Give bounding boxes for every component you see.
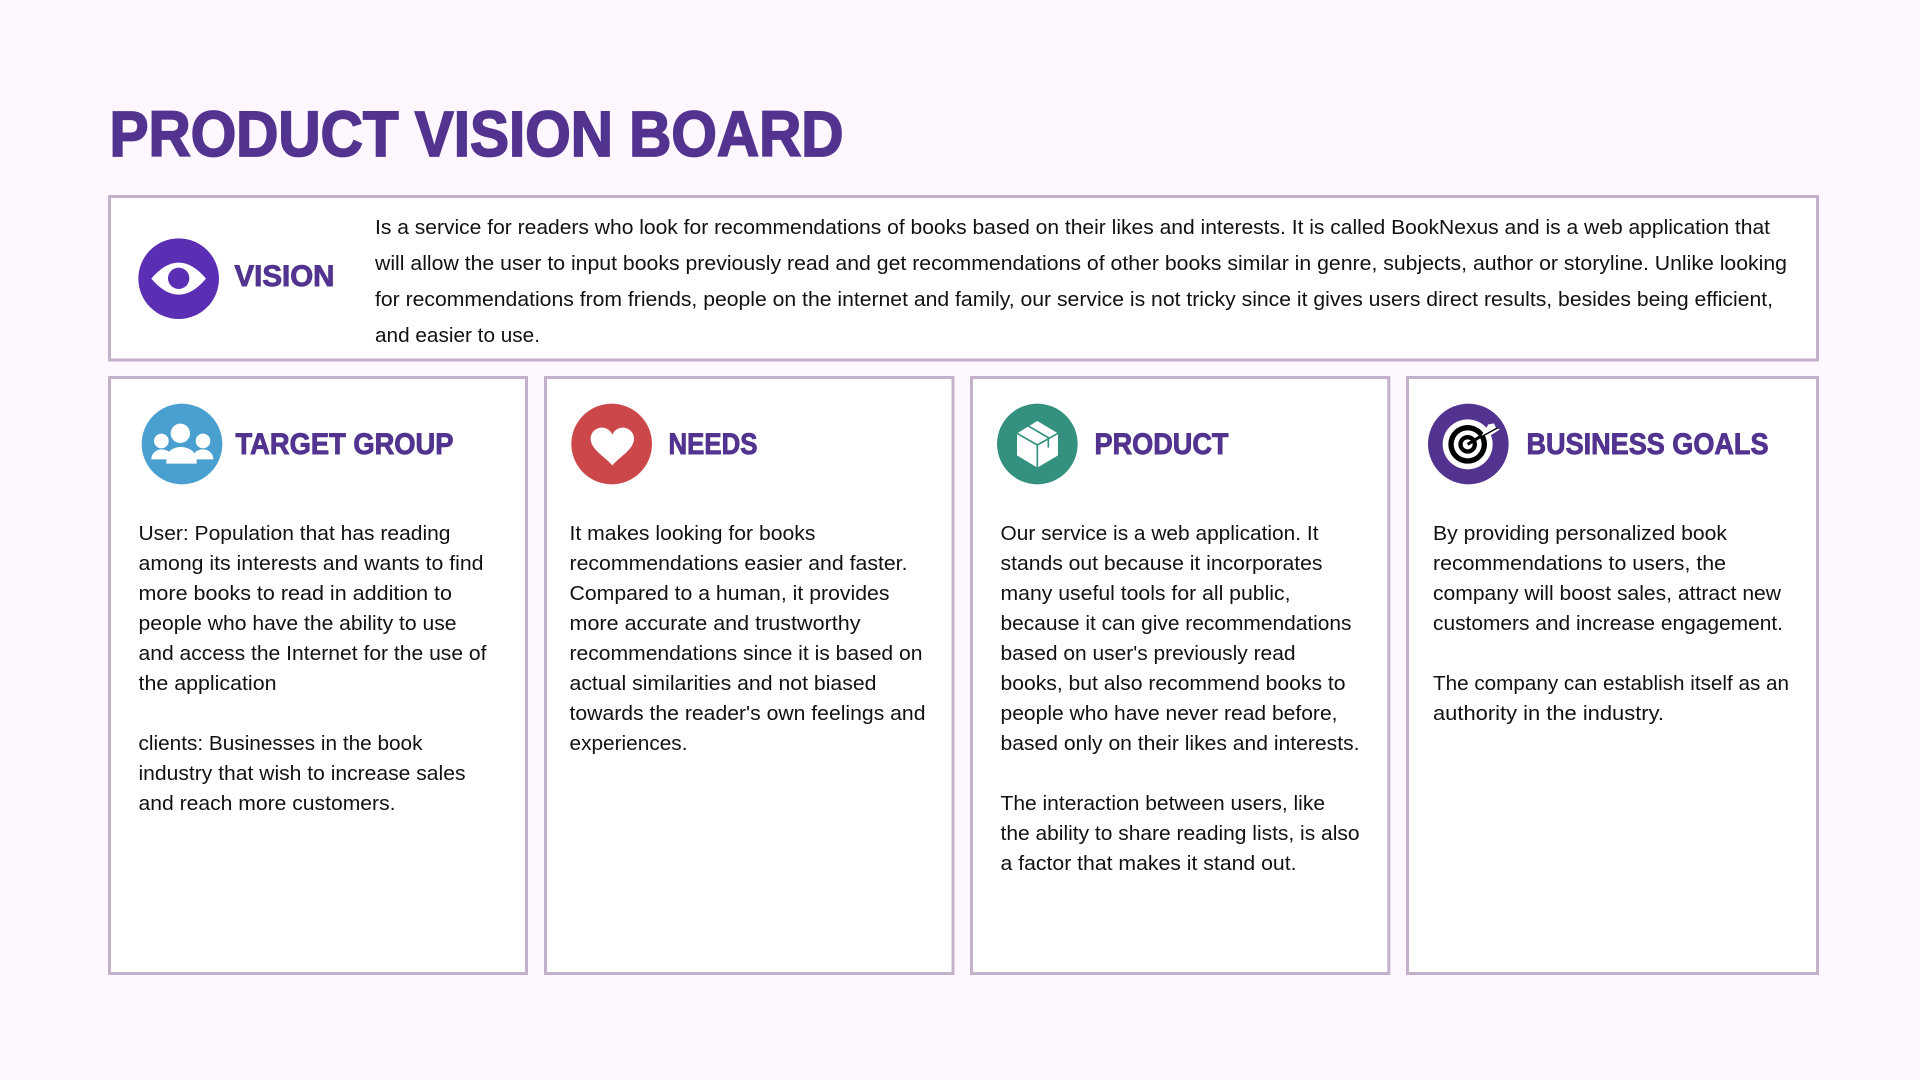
text: vision statement: Is a service for readers who look for recommendations of books based on their likes and interests. It is called BookNexus and is a web application that xyxy=(375,216,1770,239)
text: needs description: It makes looking for books xyxy=(570,522,816,545)
heading: product: PRODUCT xyxy=(1094,428,1228,461)
text: product description xyxy=(1000,522,1360,875)
text: business goals description xyxy=(1433,522,1789,725)
text: business goals description: company will boost sales, attract new xyxy=(1433,582,1781,605)
text: business goals description: customers and increase engagement. xyxy=(1433,612,1783,635)
text: vision statement xyxy=(374,216,1787,347)
text: target group description xyxy=(138,522,487,815)
text: needs description: towards the reader's own feelings and xyxy=(570,702,926,725)
text: product description: a factor that makes it stand out. xyxy=(1000,852,1296,875)
text: target group description: and reach more customers. xyxy=(138,792,396,815)
panel: target group xyxy=(110,378,526,974)
text: needs description: recommendations easier and faster. xyxy=(570,552,908,575)
icon: box xyxy=(997,404,1078,484)
panel: business goals xyxy=(1408,378,1818,974)
text: vision statement: will allow the user to input books previously read and get recommendations of other books similar in genre, subjects, author or storyline. Unlike looking xyxy=(374,252,1787,275)
text: product description: the ability to share reading lists, is also xyxy=(1000,822,1360,845)
text: product description: people who have never read before, xyxy=(1000,702,1338,725)
icon: eye xyxy=(138,238,219,319)
text: product description: books, but also recommend books to xyxy=(1000,672,1346,695)
text: needs description xyxy=(570,522,926,755)
text: product description: stands out because it incorporates xyxy=(1000,552,1322,575)
text: business goals description: By providing personalized book xyxy=(1433,522,1728,545)
icon: people xyxy=(142,404,222,484)
icon: target xyxy=(1428,404,1509,484)
text: target group description: and access the Internet for the use of xyxy=(138,642,487,665)
panel: needs xyxy=(546,378,953,974)
text: target group description: the application xyxy=(138,672,276,695)
text: target group description: among its interests and wants to find xyxy=(138,552,484,575)
heading: business goals: BUSINESS GOALS xyxy=(1526,428,1768,461)
icon: heart xyxy=(571,404,652,484)
panel: vision xyxy=(110,196,1818,360)
text: product description: The interaction between users, like xyxy=(1000,792,1325,815)
heading: vision: VISION xyxy=(234,260,334,293)
text: needs description: recommendations since it is based on xyxy=(570,642,922,665)
text: target group description: more books to read in addition to xyxy=(138,582,452,605)
text: business goals description: recommendations to users, the xyxy=(1433,552,1726,575)
text: product description: based only on their likes and interests. xyxy=(1000,732,1360,755)
text: business goals description: The company can establish itself as an xyxy=(1433,672,1789,695)
text: needs description: experiences. xyxy=(570,732,688,755)
text: needs description: Compared to a human, it provides xyxy=(570,582,890,605)
text: target group description: industry that wish to increase sales xyxy=(138,762,466,785)
text: vision statement: and easier to use. xyxy=(375,324,540,347)
text: business goals description: authority in the industry. xyxy=(1433,702,1664,725)
heading: needs: NEEDS xyxy=(668,428,758,461)
text: product description: Our service is a web application. It xyxy=(1000,522,1319,545)
heading: target group: TARGET GROUP xyxy=(236,428,454,461)
panel: product xyxy=(972,378,1389,974)
text: product description: because it can give recommendations xyxy=(1000,612,1352,635)
text: vision statement: for recommendations from friends, people on the internet and family, our service is not tricky since it gives users direct results, besides being efficient, xyxy=(375,288,1773,311)
text: target group description: people who have the ability to use xyxy=(138,612,456,635)
text: product description: many useful tools for all public, xyxy=(1000,582,1290,605)
text: needs description: more accurate and trustworthy xyxy=(570,612,861,635)
text: target group description: User: Population that has reading xyxy=(138,522,450,545)
text: target group description: clients: Businesses in the book xyxy=(138,732,423,755)
text: needs description: actual similarities and not biased xyxy=(570,672,876,695)
text: product description: based on user's previously read xyxy=(1000,642,1296,665)
title: PRODUCT VISION BOARD xyxy=(110,98,844,170)
